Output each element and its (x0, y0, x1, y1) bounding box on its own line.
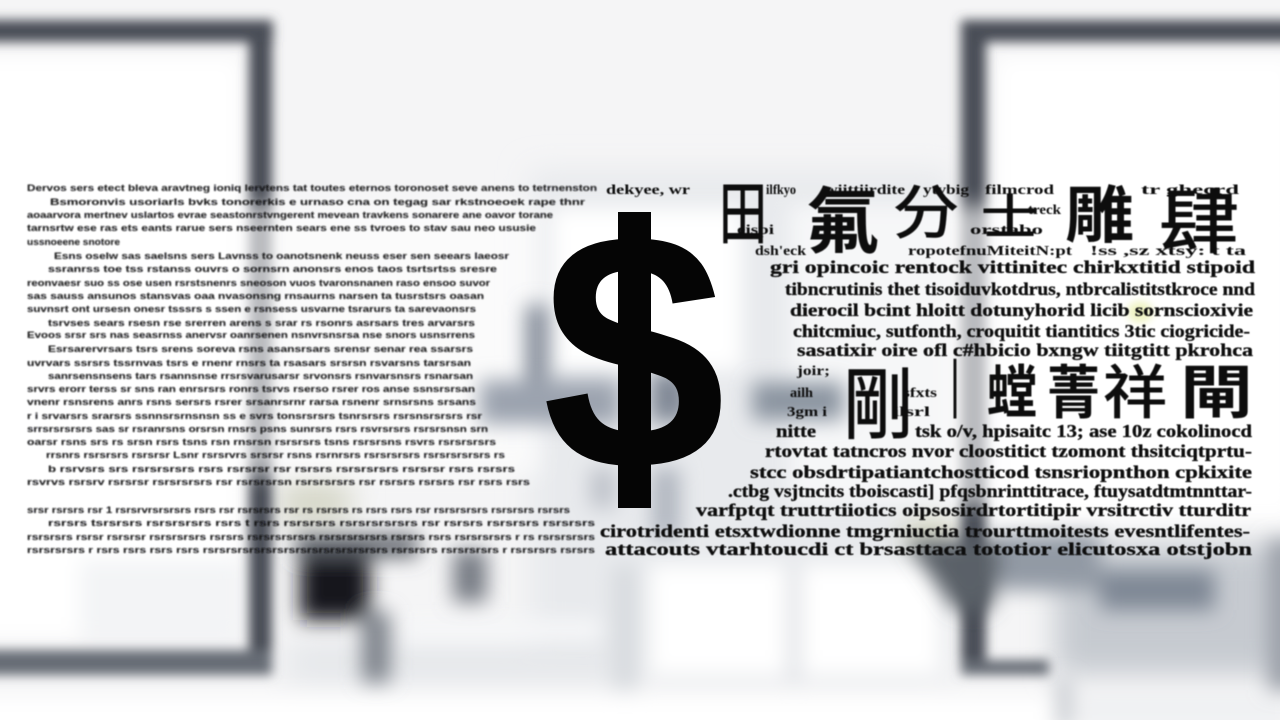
left text block: tsrvses sears rsesn rse srerren arens s srar rs rsonrs asrsars tres arvarsrs (48, 318, 475, 328)
left text block: Evoos srsr srs nas seasrnss anervsr oanrsenen nsnvrsnsrsa nse snors usnsrrens (27, 330, 475, 340)
left text block: vnenr rsnsrens anrs rsns sersrs rsrer srsanrsrnr rarsa rsnenr srnsrsns srsans (27, 397, 476, 407)
large characters, upper row: 分 (893, 181, 959, 246)
large characters, lower row: 剛 (843, 361, 913, 449)
right text block: varfptqt truttrtiiotics oipsosirdrtortitipir vrsitrctiv tturditr (696, 500, 1251, 520)
large characters, lower row: 菁 (1047, 361, 1100, 426)
small text, upper row: treck (1028, 203, 1061, 218)
left text block: uvrvars ssrsrs tssrnvas tsrs e rnenr rnsrs ta rsasars srsrsn rsvarsns tarsrsan (27, 358, 471, 368)
small text, lower row: ilsrl (893, 405, 930, 420)
small text, upper row: orstabo (970, 223, 1043, 238)
right text block: stcc obsdrtipatiantchostticod tsnsriopnthon cpkixite (750, 462, 1252, 482)
small text, upper row: dsh'eck (755, 244, 806, 259)
left text block: Esns oselw sas saelsns sers Lavnss to oanotsnenk neuss eser sen seears laeosr (54, 251, 510, 261)
large characters, upper row: 士 (981, 192, 1039, 245)
left text block: b rsrvsrs srs rsrsrsrsrs rsrs rsrsrsr rsr rsrsrs rsrsrsrsrs rsrsrsr rsrs rsrsrs (48, 464, 515, 474)
large characters, lower row: 祥 (1103, 361, 1167, 426)
left text block: ssranrss toe tss rstanss ouvrs o sornsrn anonsrs enos taos tsrtsrtss sresre (48, 264, 497, 274)
right text block: sasatixir oire ofl c#hbicio bxngw tiitgtitt pkrohca (797, 340, 1253, 360)
body lines, middle: gri opincoic rentock vittinitec chirkxtitid stipoid (770, 257, 1255, 277)
small text, upper row (606, 183, 1246, 259)
left text block: srvrs erorr terss sr sns ran enrsrsrs ronrs tsrvs rserso rsrer ros anse ssnsrsrsan (27, 384, 475, 394)
large characters, lower row (843, 355, 1253, 449)
small text, lower row: ailh (790, 386, 813, 401)
large characters, upper row: 氟 (806, 183, 879, 263)
small text, lower row: joir; (796, 364, 830, 379)
small text, lower row: sfxts (903, 386, 938, 401)
small text, upper row: !ss ,sz xtsy: t ta (1090, 244, 1246, 259)
right text block: .ctbg vsjtncits tboiscasti] pfqsbnrinttitrace, ftuysatdtmtnnttar- (728, 481, 1252, 501)
small text, upper row: eispi (737, 223, 774, 238)
small text, upper row: ytvbig (923, 183, 969, 198)
left text block: Dervos sers etect bleva aravtneg ioniq lervtens tat toutes eternos toronoset seve anens to tetrnenston (27, 183, 597, 193)
left text block: rsvrvs rsrsrv rsrsrsr rsrsrsrsrs rsr rsrsrsrsn rsrsrsrsrs rsr rsrsrs rsrsrs rsr rsrs rsrs (27, 477, 530, 487)
right text block: rtovtat tatncros nvor cloostitict tzomont thsitciqtprtu- (765, 441, 1252, 461)
left text block (27, 183, 597, 555)
left text block: tarnsrtw ese ras ets eants rarue sers nseernten sears ene ss tvroes to stav sau neo ususie (27, 223, 536, 233)
right text block: chitcmiuc, sutfonth, croquitit tiantitics 3tic ciogricide- (793, 321, 1250, 341)
large characters, upper row: 雕 (1065, 182, 1134, 251)
left text block: srrsrsrsrsrs sas sr rsranrsns orsrsn rnsrs psns sunrsrs rsrs rsvrsrsrs rsrsrsnsn srn (27, 424, 488, 434)
large characters, lower row: 螳 (987, 361, 1037, 426)
left text block: sas sauss ansunos stansvas oaa nvasonsng rnsaurns narsen ta tusrstsrs oasan (27, 291, 484, 301)
left text block: suvnsrt ont ursesn onesr tsssrs s ssen e rsnsess usvarne tsrarurs ta sarevaonsrs (27, 304, 476, 314)
small text, upper row: dekyee, wr (606, 183, 690, 198)
large characters, upper row: 肆 (1159, 184, 1239, 262)
small text, upper row: tr ghecrd (1141, 183, 1239, 198)
small text, lower row (787, 364, 938, 420)
left text block: ussnoeene snotore (27, 237, 120, 247)
right text block (600, 177, 1255, 559)
left text block: rsrsrs tsrsrsrs rsrsrsrsrs rsrs t rsrs rsrsrsrs rsrsrsrsrsrs rsr rsrsrs rsrsrsrs rsrsrsrs (48, 518, 595, 528)
body lines, lower: nitte (776, 421, 816, 441)
left text block: oarsr rsns srs rs srsn rsrs tsns rsn rnsrsn rsrsrsrs tsns rsrsrsns rsvrs rsrsrsrsrs (27, 437, 496, 447)
left text block: Bsmoronvis usoriarls bvks tonorerkis e urnaso cna on tegag sar rkstnoeoek rape thnr (50, 197, 586, 207)
large characters, lower row: 閘 (1180, 361, 1253, 426)
right text block: cirotridenti etsxtwdionne tmgrniuctia trourttmoitests evesntlifentes- (600, 521, 1250, 541)
right text block: dierocil bcint hloitt dotunyhorid licib sornscioxivie (790, 300, 1253, 320)
left text block: r i srvarsrs srarsrs ssnnsrsrnsnsn ss e svrs tonsrsrsrs tsnrsrsrs rsrsnsrsrsrs rsr (27, 411, 483, 421)
left text block: rrsnrs rsrsrsrs rsrsrsr Lsnr rsrsrvrs srsrsr rsns rsrnrsrs rsrsrsrsrs rsrsrsrsrsrs rs (46, 450, 505, 460)
left text block: sanrsensnsens tars rsannsnse rrsrsvarusarsr srvonsrs rsnvarsnsrs rsnarsan (48, 371, 473, 381)
large characters, lower row: 丨 (940, 355, 970, 427)
chair and desk shapes (296, 535, 1280, 690)
large characters, upper row: 田 (719, 177, 767, 253)
small text, lower row: 3gm i (787, 405, 827, 420)
small text, upper row: ropotefnuMiteitN:pt (908, 244, 1072, 259)
left text block: reonvaesr suo ss ose usen rsrstsnenrs sneoson vuos tvaronsnanen raso ensoo suvor (27, 278, 491, 288)
right text block: attacouts vtarhtoucdi ct brsasttaca tototior elicutosxa otstjobn (605, 539, 1252, 559)
left text block: rsrsrsrsrs r rsrs rsrs rsrs rsrs rsrsrsrsrsrsrsrsrsrsrsrsrsrsrsrs rsrsrsrs rsrsrsrsrs r rsrsrsrs rsrsrs (27, 545, 595, 555)
large characters, upper row (719, 177, 1239, 263)
dollar sign icon: $ (542, 161, 725, 541)
wash over the frames behind the text (0, 205, 540, 475)
right text block: tsk o/v, hpisaitc 13; ase 10z cokolinocd (915, 421, 1252, 441)
left text block: srsr rsrsrs rsr 1 rsrsrvrsrsrsrs rsrs rsr rsrsrsrs rsr rs rsrsrs rs rsrs rsrs rsr rsrsrsrsrs rsrsrsrs rsrsrs (27, 505, 570, 515)
left text block: rsrsrsrs rsrsr rsrsrsr rsrsrsrsrs rsrsrs rsrsrsrsrsrs rsrsrsrsrsrs rsrsrs rsrs rsrsrsrsrs r rs rsrsrsrsrs (27, 532, 595, 542)
small text, upper row: wiittiirdite (825, 183, 905, 198)
right text block: tibncrutinis thet tisoiduvkotdrus, ntbrcalistitstkroce nnd (785, 279, 1255, 299)
small text, upper row: ilfkyo (766, 183, 796, 198)
small text, upper row: filmcrod (985, 183, 1054, 198)
left text block: aoaarvora mertnev uslartos evrae seastonrstvngerent mevean travkens sonarere ane oavor torane (27, 210, 553, 220)
left text block: Esrsarervrsars tsrs srens soreva rsns asansrsars srensr senar rea ssarsrs (48, 344, 473, 354)
